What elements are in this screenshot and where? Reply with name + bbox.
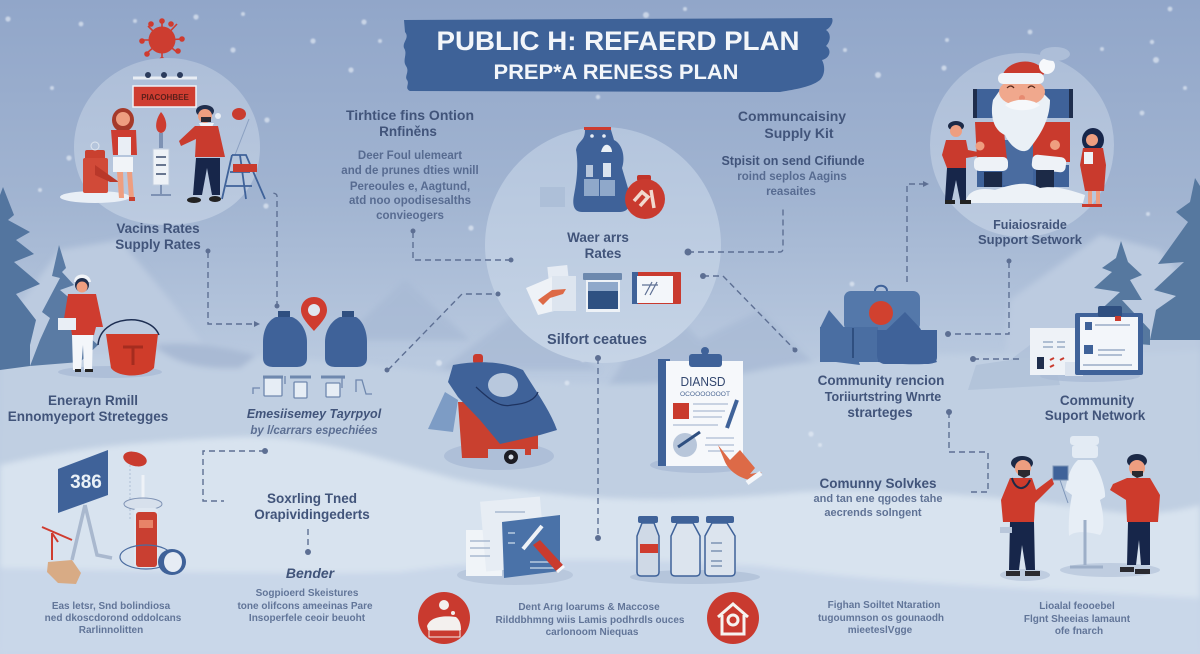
clipboard checklist: OCOOOOOOOT [680, 392, 730, 398]
text: top-left block [341, 107, 479, 222]
panel: water and rates circle [485, 127, 721, 363]
text: community region label: Community rencion [818, 373, 944, 388]
icon: red circle care badge [418, 592, 470, 644]
icon: red circle house badge [707, 592, 759, 644]
text: community services block [814, 476, 942, 519]
title banner [404, 18, 833, 92]
text: bottom-left block: ned dkoscdorond oddolcans [45, 613, 182, 624]
easel with number board [42, 450, 112, 584]
text: water rates label [567, 230, 629, 261]
woman in red [111, 108, 137, 201]
santa body [974, 122, 1070, 188]
text: vaccine rates label: Supply Rates [115, 237, 201, 252]
girl [1080, 128, 1106, 207]
trees: left [0, 187, 98, 370]
text: bottom-left block: Eas letsr, Snd bolindiosa [52, 601, 171, 612]
title line 1: PUBLIC H: REFAERD PLAN [436, 26, 800, 56]
text: communications kit block: Stpisit on send Cifiunde [721, 154, 865, 168]
text: bottom-right block 1: Fighan Soiltet Ntaration [828, 600, 940, 611]
red hammer [42, 527, 72, 560]
boy [942, 121, 984, 204]
man right [1110, 454, 1160, 574]
text: energy support label [8, 393, 168, 424]
snowflakes [5, 7, 1187, 447]
text: communications kit block: Supply Kit [764, 125, 834, 141]
red supply bag [83, 142, 119, 193]
text: communications kit block: roind seplos Aagins [737, 171, 847, 183]
text: top-left block: and de prunes dties wnill [341, 165, 479, 177]
text: bender block [237, 565, 373, 624]
snow base [966, 184, 1085, 203]
santa beard and face [992, 78, 1050, 151]
text: community region label: strarteges [847, 405, 913, 420]
text: community region label [818, 373, 944, 420]
text: trend label: Orapividingederts [254, 507, 370, 522]
text: water rates label: Rates [585, 246, 621, 261]
text: bottom-right block 2: Lioalal feooebel [1039, 601, 1115, 612]
background: snow hills upper [0, 235, 1200, 560]
text: top-left block: convieogers [376, 210, 444, 222]
dashed connector lines [203, 181, 1023, 555]
trees: right [1090, 178, 1200, 345]
text: water rates label: Waer arrs [567, 230, 629, 245]
text: bottom-right block 1: mieeteslVgge [848, 625, 913, 636]
text: emergency travel label: by l/carrars espechiées [250, 425, 378, 437]
red sack [625, 175, 665, 219]
blue backdrop [973, 89, 1073, 118]
panel: vaccine station circle [60, 58, 265, 225]
documents clipboard right [968, 306, 1143, 390]
red pointing hand [718, 445, 762, 480]
worker with red bucket [58, 274, 162, 378]
blue covered cart [428, 354, 557, 470]
text: top-left block: Tirhtice fins Ontion [346, 107, 474, 123]
sign: PIACOHBEE [141, 93, 189, 102]
clipboard checklist [650, 347, 762, 483]
text: bottom-left block: Rarlinnolitten [79, 625, 143, 636]
tablet icon [632, 272, 681, 304]
text: top-left block: Pereoules e, Aagtund, [350, 181, 470, 193]
red bucket [98, 320, 159, 345]
background: distant mountains [340, 280, 850, 400]
text: trend label [254, 491, 370, 522]
text: bottom-centre block: carlonoom Niequas [546, 627, 639, 638]
community volunteers with dress form [1000, 436, 1160, 581]
open manual with documents [457, 497, 573, 585]
background: foreground snow [0, 437, 1200, 654]
text: support network label top [978, 218, 1083, 247]
text: bottom-left block [45, 601, 182, 636]
sign [133, 72, 197, 107]
title line 2: PREP*A RENESS PLAN [494, 61, 738, 84]
text: support network label top: Fuiaiosraide [993, 218, 1067, 232]
icon: red virus [140, 19, 184, 62]
text: community support network label [1045, 393, 1146, 423]
text: bottom-centre block [496, 602, 685, 638]
text: vaccine rates label [115, 221, 201, 252]
tan log [47, 560, 81, 584]
tape roll [158, 549, 186, 575]
text: vaccine rates label: Vacins Rates [116, 221, 200, 236]
text: energy support label: Enerayn Rmill [48, 393, 138, 408]
man in red sweater [179, 105, 225, 203]
ground snow [60, 191, 130, 203]
vaccine vials [630, 516, 760, 584]
text: community support network label: Suport Network [1045, 408, 1146, 423]
text: support network label top: Support Setwork [978, 232, 1083, 247]
syringe stand [151, 112, 171, 195]
small supply icons [253, 376, 372, 398]
man left [1000, 456, 1068, 576]
panel: portrait of Santa [930, 47, 1114, 237]
text: bender block: tone olifcons ameeinas Pare [237, 601, 373, 612]
text: comfort features label: Silfort ceatues [547, 332, 647, 348]
text: bender block: Bender [286, 565, 336, 581]
jar icon [583, 273, 622, 312]
text: top-left block: Rnfiněns [379, 124, 437, 139]
text: community services block: aecrends solngent [824, 507, 922, 519]
text: top-left block: Deer Foul ulemeart [358, 150, 462, 162]
text: community services block: Comunny Solvkes [819, 476, 937, 491]
text: top-left block: atd noo opodisesalths [349, 195, 471, 207]
paper and hand icon [526, 265, 576, 315]
travel bags and suitcase [820, 286, 937, 365]
text: emergency travel label: Emesiisemey Tayrpyol [247, 407, 382, 421]
text: community support network label: Community [1060, 393, 1135, 408]
text: bottom-right block 2: Flgnt Sheeias lamaunt [1024, 614, 1131, 625]
text: bottom-right block 1 [818, 600, 944, 636]
text: bender block: Sogpioerd Skeistures [256, 588, 359, 599]
text: bottom-right block 2 [1024, 601, 1131, 637]
text: trend label: Soxrling Tned [267, 491, 357, 506]
text: communications kit block: reasaites [766, 186, 816, 198]
text: community region label: Toriiurtstring Wnrte [825, 390, 941, 404]
text: bottom-centre block: Dent Arıg loarums & Maccose [518, 602, 660, 613]
santa hat [998, 47, 1070, 84]
text: emergency travel label [247, 407, 382, 437]
text: community services block: and tan ene qgodes tahe [814, 493, 942, 505]
text: communications kit block: Communcaisiny [738, 108, 846, 124]
text: communications kit block [721, 108, 865, 198]
icon: location pin [301, 297, 327, 331]
text: bottom-right block 2: ofe fnarch [1055, 626, 1103, 637]
easel with number board: 386 [70, 472, 102, 493]
icon group: backpacks and pin [253, 297, 372, 398]
ladder easel and balloon [222, 108, 265, 199]
text: energy support label: Ennomyeport Stretegges [8, 409, 168, 424]
blue tag held [1053, 466, 1068, 503]
test tube with plunger [120, 449, 186, 575]
clipboard checklist: DIANSD [680, 374, 726, 389]
white dress form [1065, 436, 1105, 567]
text: bender block: Insoperfele ceoir beuoht [249, 613, 366, 624]
blue supply bottle [573, 127, 631, 212]
text: bottom-centre block: Rilddbhmng wiis Lamis podhrdls ouces [496, 615, 685, 626]
text: bottom-right block 1: tugoumnson os gounaodh [818, 613, 944, 624]
pen and red tube [523, 526, 542, 549]
